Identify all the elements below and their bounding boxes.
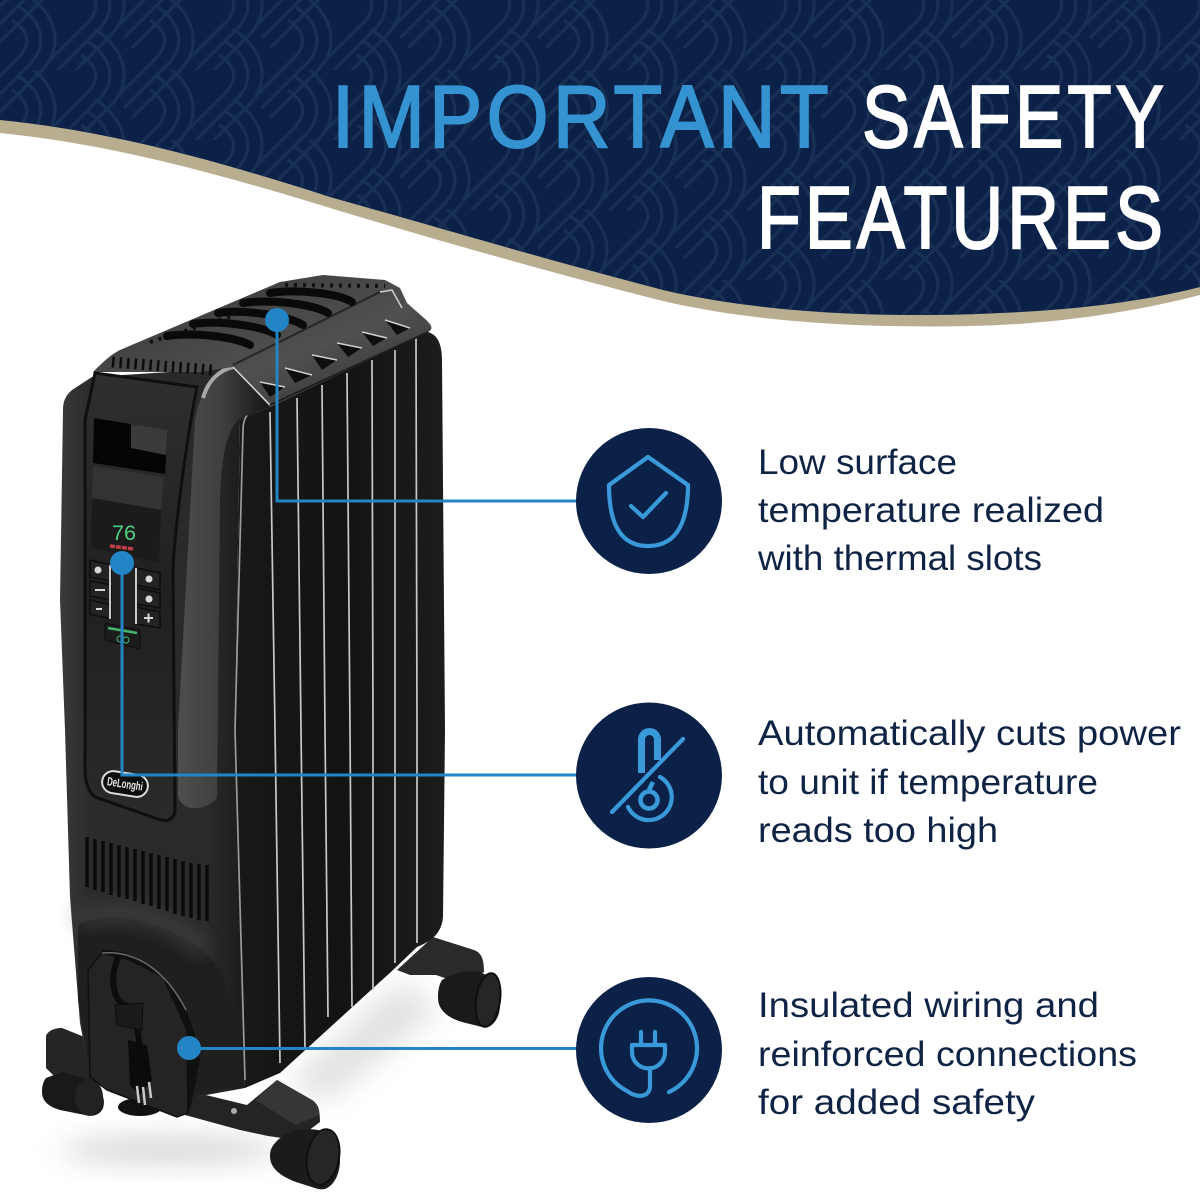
text: insulated wiring: for added safety: [758, 1083, 1036, 1122]
text: insulated wiring: reinforced connections: [758, 1035, 1137, 1074]
back right foot and wheel: [397, 937, 504, 1028]
top slots: [167, 291, 352, 345]
front right foot and wheel: [185, 1080, 344, 1189]
eco button: [105, 623, 140, 649]
edge triangles: [260, 320, 410, 397]
text: insulated wiring: Insulated wiring and: [758, 986, 1099, 1025]
floor shadows: [60, 980, 440, 1162]
callout 3 connector: [177, 1036, 577, 1060]
curved grey band between panel and fins: [178, 367, 270, 808]
text: automatic power cut: Automatically cuts power: [758, 714, 1181, 753]
text: insulated wiring: [758, 986, 1137, 1122]
text: automatic power cut: reads too high: [758, 811, 998, 850]
title: [332, 67, 1168, 267]
title: IMPORTANT: [332, 67, 833, 166]
callout 1 connector: [265, 308, 577, 501]
handle opening: [93, 418, 168, 474]
heater body: front side: [60, 367, 270, 1098]
text: low surface temperature: temperature realized: [758, 491, 1104, 530]
brand badge: DeLonghi: [106, 774, 144, 794]
button glyphs: [94, 566, 153, 622]
left foot and wheel: [42, 1028, 162, 1116]
text: low surface temperature: Low surface: [758, 443, 957, 482]
header banner: [0, 0, 1200, 326]
left buttons: [90, 560, 111, 619]
icon: shield with check: [576, 428, 722, 574]
brand badge: [101, 770, 149, 798]
heater product illustration: [42, 275, 504, 1189]
text: automatic power cut: to unit if temperature: [758, 763, 1098, 802]
text: low surface temperature: with thermal slots: [757, 539, 1042, 578]
top surface: [93, 275, 431, 407]
icon: plug with cord: [576, 977, 722, 1123]
cord wrap and plate: [88, 950, 200, 1117]
control panel: [85, 373, 197, 820]
right buttons: [136, 568, 160, 628]
fins side: [235, 332, 445, 1088]
display: [91, 466, 164, 563]
lower vent slots: [87, 837, 207, 921]
callout 2 connector: [110, 551, 577, 775]
display: 76: [112, 522, 136, 545]
text: low surface temperature: [757, 443, 1104, 578]
icon: crossed-out thermometer: [576, 702, 722, 848]
callout lines and dots: [110, 308, 577, 1060]
text: automatic power cut: [758, 714, 1181, 850]
